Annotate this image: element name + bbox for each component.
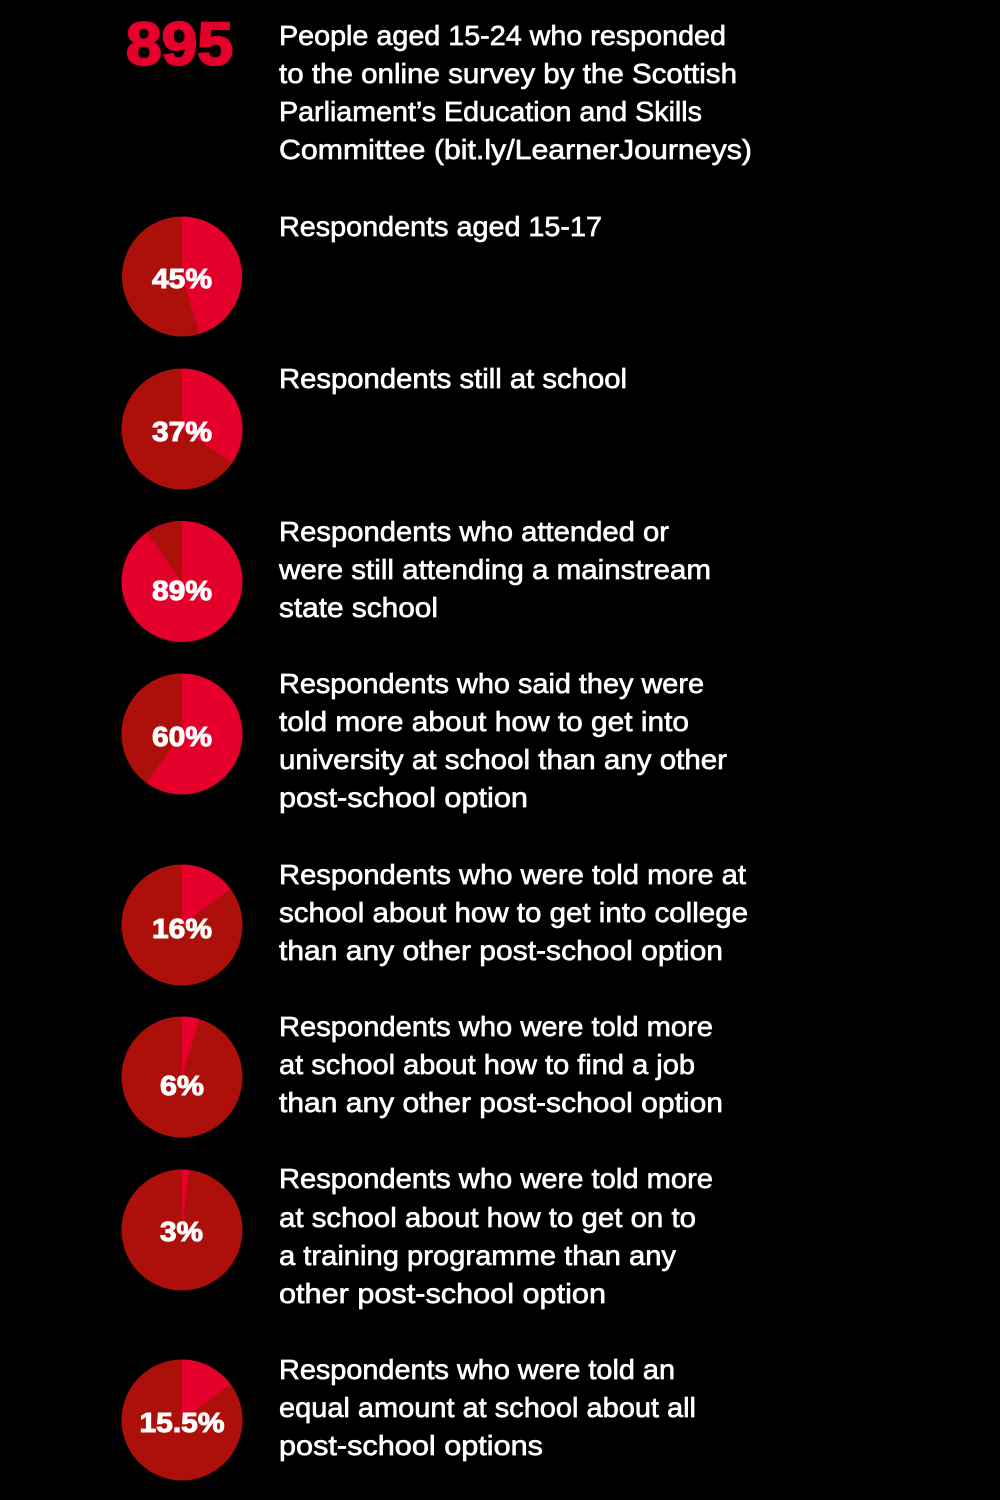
text: told more about training programme: at school about how to get on to [279, 1202, 696, 1233]
text: survey description: People aged 15-24 who responded [279, 20, 726, 51]
pie chart: 15.5%: 15.5% [140, 1407, 225, 1438]
text: told more about university: university at school than any other [279, 744, 727, 775]
text: respondents still at school: Respondents still at school [279, 363, 627, 394]
text: told an equal amount: equal amount at school about all [279, 1392, 696, 1423]
pie chart: 15.5% [122, 1360, 242, 1480]
text: mainstream state school: state school [279, 592, 438, 623]
text: told an equal amount: Respondents who were told an [279, 1354, 675, 1385]
pie chart: 3% [122, 1170, 242, 1290]
text: told more about college: than any other post-school option [279, 935, 723, 966]
pie chart: 45%: 45% [152, 263, 212, 294]
pie chart: 16% [122, 864, 242, 986]
text: told an equal amount [279, 1354, 696, 1461]
text: told more about finding a job: Respondents who were told more [279, 1011, 713, 1042]
text: survey description [279, 20, 752, 165]
text: told more about finding a job: at school about how to find a job [279, 1049, 695, 1080]
text: told more about college: school about how to get into college [279, 897, 748, 928]
text: told more about university: Respondents who said they were [279, 668, 704, 699]
text: mainstream state school: Respondents who attended or [279, 516, 669, 547]
text: respondents aged 15-17: Respondents aged 15-17 [279, 211, 602, 242]
text: told more about finding a job [279, 1011, 723, 1118]
pie chart: 89%: 89% [152, 575, 212, 606]
pie chart: 60%: 60% [152, 721, 212, 752]
pie chart: 3%: 3% [160, 1216, 203, 1247]
pie chart: 6% [122, 1016, 242, 1138]
text: told more about training programme: Respondents who were told more [279, 1163, 713, 1194]
pie chart: 45% [122, 216, 242, 336]
text: mainstream state school [278, 516, 711, 623]
pie chart: 37%: 37% [152, 416, 212, 447]
text: told more about university [279, 668, 727, 813]
text: told an equal amount: post-school options [279, 1430, 543, 1461]
pie chart: 37% [122, 368, 243, 490]
headline number: 895: 895 [126, 10, 233, 78]
text: survey description: Parliament’s Education and Skills [279, 96, 702, 127]
text: told more about college [279, 859, 748, 966]
pie chart: 89% [122, 521, 242, 642]
text: told more about university: told more about how to get into [279, 706, 689, 737]
text: told more about training programme: other post-school option [279, 1278, 606, 1309]
text: mainstream state school: were still attending a mainstream [278, 554, 711, 585]
text: told more about finding a job: than any other post-school option [279, 1087, 723, 1118]
pie chart: 60% [122, 674, 242, 794]
text: told more about college: Respondents who were told more at [279, 859, 746, 890]
pie chart: 16%: 16% [152, 913, 212, 944]
text: survey description: Committee (bit.ly/LearnerJourneys) [279, 134, 752, 165]
text: told more about university: post-school option [279, 782, 528, 813]
text: told more about training programme [279, 1163, 713, 1309]
text: told more about training programme: a training programme than any [279, 1240, 676, 1271]
text: survey description: to the online survey by the Scottish [279, 58, 737, 89]
pie chart: 6%: 6% [160, 1070, 204, 1101]
